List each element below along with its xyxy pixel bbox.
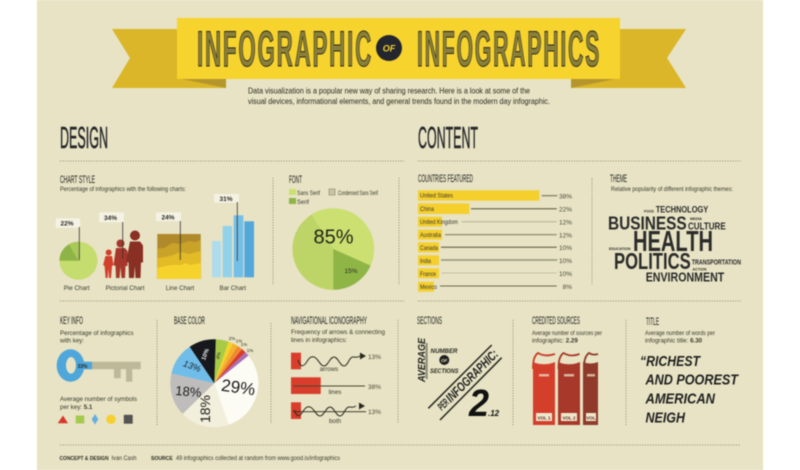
credited sources subtitle xyxy=(532,330,602,344)
panel: key info xyxy=(57,315,141,424)
country names: France xyxy=(420,271,436,278)
pie chart xyxy=(56,218,98,292)
title quote: AMERICAN xyxy=(645,390,716,408)
chart style subtitle: Percentage of infographics with the following charts: xyxy=(60,186,186,193)
country names: United States xyxy=(420,192,453,200)
bar chart xyxy=(212,194,254,292)
word cloud: ENVIRONMENT xyxy=(646,270,724,285)
country values: 10% xyxy=(559,258,572,265)
base color pie chart: 1% xyxy=(236,338,242,344)
base color pie chart: 2% xyxy=(229,336,235,341)
icon: books xyxy=(533,353,598,425)
base color pie chart: 1% xyxy=(247,348,253,353)
icon: books: VOL xyxy=(586,416,596,420)
country values: 12% xyxy=(559,232,572,240)
country values: 22% xyxy=(559,206,572,214)
base color pie chart: 4% xyxy=(215,351,223,360)
bar chart: 31% xyxy=(219,196,233,203)
lines row xyxy=(291,377,381,396)
base color pie chart: 18% xyxy=(175,383,202,400)
word cloud: FOOD xyxy=(644,209,654,214)
banner ribbon xyxy=(112,18,686,88)
country names: United Kingdom xyxy=(420,219,458,226)
panel: sections: SECTIONS xyxy=(417,315,442,327)
navigation subtitle: lines in infographics: xyxy=(291,337,347,344)
both row xyxy=(291,402,381,425)
font pie chart: 15% xyxy=(344,268,358,275)
pie chart: Pie Chart xyxy=(64,285,90,292)
word cloud: TRANSPORTATION xyxy=(692,259,741,266)
country values: 8% xyxy=(563,284,572,291)
word cloud: EDUCATION xyxy=(609,246,631,251)
navigation subtitle xyxy=(291,329,385,344)
country names: Canada xyxy=(420,245,438,252)
panel: theme xyxy=(608,173,741,285)
typographic statement: .12 xyxy=(488,409,500,418)
word cloud xyxy=(608,205,741,285)
legend symbols xyxy=(58,414,133,424)
country values: 12% xyxy=(559,220,572,226)
symbols note xyxy=(60,396,137,411)
panel: credited sources: CREDITED SOURCES xyxy=(532,315,580,327)
panel: font: FONT xyxy=(289,174,302,186)
title quote: NEIGH xyxy=(646,410,686,426)
panel: navigational iconography: NAVIGATIONAL ICONOGRAPHY xyxy=(291,315,367,327)
navigation subtitle: Frequency of arrows & connecting xyxy=(291,329,385,336)
typographic statement: NUMBER xyxy=(430,348,458,355)
word cloud: CULTURE xyxy=(688,220,726,232)
title quote: “RICHEST xyxy=(640,353,701,370)
pie chart: 22% xyxy=(60,220,74,228)
country names xyxy=(420,192,458,291)
key info subtitle xyxy=(59,330,134,344)
arrows row xyxy=(291,352,381,373)
word cloud: MEDIA xyxy=(690,216,702,221)
title: OF xyxy=(383,44,396,54)
word cloud: POLITICS xyxy=(614,248,691,274)
pictorial chart: Pictorial Chart xyxy=(106,285,145,292)
panel: navigational iconography xyxy=(291,315,385,425)
country values: 10% xyxy=(559,271,572,278)
country names: Australia xyxy=(420,232,441,239)
theme subtitle: Relative popularity of different infographic themes: xyxy=(611,186,733,193)
credited sources subtitle: infographic: 2.29 xyxy=(532,338,578,344)
panel: base color xyxy=(170,315,258,427)
country values xyxy=(559,194,572,291)
text: CONTENT xyxy=(418,120,478,155)
word cloud: BUSINESS xyxy=(608,212,687,233)
font legend: Condensed Sans Serif xyxy=(338,190,378,197)
typographic statement: 2 xyxy=(468,383,489,425)
footer credits xyxy=(60,455,340,462)
bar chart: Bar Chart xyxy=(219,285,246,292)
panel: credited sources xyxy=(532,315,602,425)
base color pie chart: 13% xyxy=(182,358,202,374)
line chart xyxy=(156,212,201,292)
panel: sections xyxy=(416,315,502,425)
footer credits: CONCEPT & DESIGN xyxy=(60,456,109,462)
title subtitle: Average number of words per xyxy=(645,330,715,337)
word cloud: ACTION xyxy=(692,266,707,272)
typographic statement xyxy=(416,337,502,425)
panel: chart style: CHART STYLE xyxy=(60,174,95,186)
country names: India xyxy=(420,258,431,265)
arrows row: 13% xyxy=(368,354,381,361)
title subtitle: infographic title: 6.30 xyxy=(645,338,703,344)
credited sources subtitle: Average number of sources per xyxy=(532,330,602,337)
font legend xyxy=(289,189,378,206)
intro text: visual devices, informational elements, and general trends found in the modern day infographic. xyxy=(248,97,550,106)
pictorial chart: 34% xyxy=(104,215,117,222)
typographic statement: PER xyxy=(436,397,452,413)
panel: chart style xyxy=(56,174,254,292)
footer credits: SOURCE xyxy=(151,456,173,462)
typographic statement: SECTIONS xyxy=(430,368,459,375)
pictorial chart xyxy=(99,212,145,292)
panel: title: TITLE xyxy=(646,316,659,328)
intro text: Data visualization is a popular new way of sharing research. Here is a look at some of the xyxy=(248,86,530,96)
word cloud: HEALTH xyxy=(633,226,713,258)
both row: 13% xyxy=(368,409,381,416)
font pie chart xyxy=(292,208,374,290)
line chart: Line Chart xyxy=(166,285,195,292)
typographic statement: INFOGRAPHIC: xyxy=(443,346,501,405)
text: DESIGN xyxy=(60,120,108,155)
font legend: Serif xyxy=(297,199,309,206)
line chart: 24% xyxy=(161,214,175,222)
icon: key: 33% xyxy=(77,364,88,370)
footer credits: 49 infographics collected at random from www.good.is/infographics xyxy=(176,455,340,462)
panel: base color: BASE COLOR xyxy=(174,315,205,327)
both row: both xyxy=(329,418,342,425)
key info subtitle: with key: xyxy=(59,338,84,344)
country values: 10% xyxy=(559,245,572,252)
panel: countries featured: COUNTRIES FEATURED xyxy=(418,173,473,185)
country names: China xyxy=(420,206,434,213)
base color pie chart xyxy=(170,336,258,427)
title quote xyxy=(640,353,740,426)
panel: theme: THEME xyxy=(610,173,627,185)
font legend: Sans Serif xyxy=(297,190,320,197)
font pie chart: 85% xyxy=(313,226,354,248)
base color pie chart: 1% xyxy=(241,342,247,347)
arrows row: arrows xyxy=(320,366,338,373)
footer credits: Ivan Cash xyxy=(112,455,137,462)
title subtitle xyxy=(645,330,715,344)
country values: 38% xyxy=(559,194,572,200)
symbols note: per key: 5.1 xyxy=(60,404,93,411)
intro text xyxy=(248,86,550,106)
symbols note: Average number of symbols xyxy=(60,396,137,403)
country bars xyxy=(418,190,539,292)
title quote: AND POOREST xyxy=(645,372,740,388)
lines row: lines xyxy=(329,389,341,396)
title: INFOGRAPHIC xyxy=(197,21,373,77)
base color pie chart: 10% xyxy=(201,347,211,361)
panel: font xyxy=(289,174,378,290)
panel: countries featured xyxy=(418,173,572,292)
panel: title xyxy=(640,316,740,426)
key info subtitle: Percentage of infographics xyxy=(60,330,134,337)
typographic statement: AVERAGE xyxy=(416,337,428,383)
word cloud: TECHNOLOGY xyxy=(656,205,708,215)
base color pie chart: 29% xyxy=(220,376,256,399)
icon: books: VOL 1 xyxy=(538,416,551,420)
base color pie chart: 18% xyxy=(197,395,213,423)
country names: Mexico xyxy=(420,284,437,291)
country leader lines xyxy=(440,196,557,286)
lines row: 38% xyxy=(368,384,381,391)
icon: books: VOL 2 xyxy=(563,416,576,420)
typographic statement: OF xyxy=(441,358,448,363)
panel: key info: KEY INFO xyxy=(60,315,83,327)
